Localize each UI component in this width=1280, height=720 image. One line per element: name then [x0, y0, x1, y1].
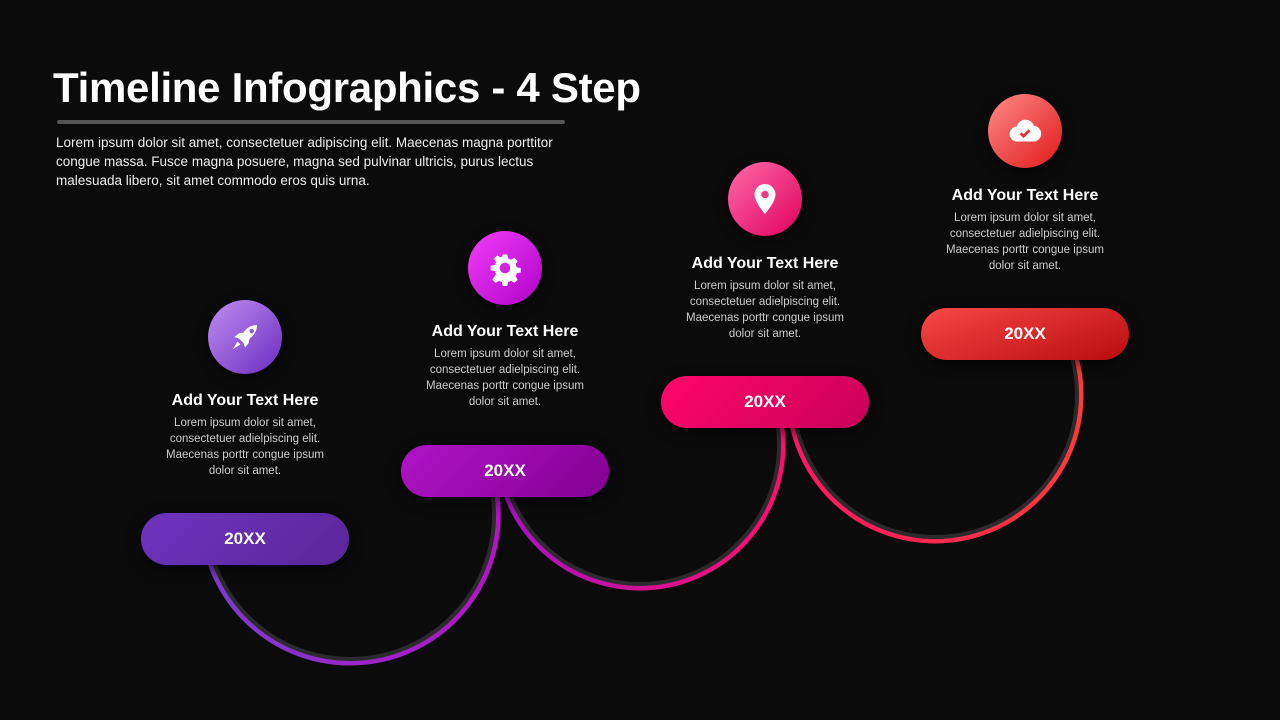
icon: cloud check [988, 94, 1062, 168]
text block: consectetuer adielpiscing elit. [690, 296, 840, 308]
text block: Add Your Text Here [432, 323, 578, 340]
text block [166, 392, 324, 477]
text block [686, 255, 844, 340]
text block: Add Your Text Here [952, 187, 1098, 204]
step 1 [141, 300, 349, 579]
pill: 20XX: 20XX [484, 461, 526, 480]
text block: Maecenas porttr congue ipsum [686, 312, 844, 324]
pill: 20XX [401, 445, 609, 497]
title: Timeline Infographics - 4 Step [53, 64, 641, 111]
text block: Lorem ipsum dolor sit amet, [954, 212, 1096, 224]
text block: Maecenas porttr congue ipsum [166, 449, 324, 461]
text block: Maecenas porttr congue ipsum [426, 380, 584, 392]
step 3 [661, 162, 869, 442]
text block: Add Your Text Here [172, 392, 318, 409]
text block: dolor sit amet. [469, 396, 541, 408]
step 2 [401, 231, 609, 511]
pill: 20XX: 20XX [744, 392, 786, 411]
text block: dolor sit amet. [729, 328, 801, 340]
text block [946, 187, 1104, 272]
pill: 20XX: 20XX [1004, 324, 1046, 343]
text block: dolor sit amet. [989, 260, 1061, 272]
text block: Lorem ipsum dolor sit amet, [174, 417, 316, 429]
icon: location pin [728, 162, 802, 236]
text block: consectetuer adielpiscing elit. [170, 433, 320, 445]
intro text: Lorem ipsum dolor sit amet, consectetuer adipiscing elit. Maecenas magna porttitor congue massa. Fusce magna posuere, magna sed pulvinar ultricis, purus lectus malesuada libero, sit amet commodo eros quis urna. [56, 135, 553, 188]
text block: Lorem ipsum dolor sit amet, [434, 348, 576, 360]
pill: 20XX: 20XX [224, 529, 266, 548]
pill: 20XX [661, 376, 869, 428]
icon: rocket [208, 300, 282, 374]
text block: consectetuer adielpiscing elit. [950, 228, 1100, 240]
step 4 [921, 94, 1129, 374]
text block: dolor sit amet. [209, 465, 281, 477]
icon: gear [468, 231, 542, 305]
text block: consectetuer adielpiscing elit. [430, 364, 580, 376]
text block: Maecenas porttr congue ipsum [946, 244, 1104, 256]
pill: 20XX [141, 513, 349, 565]
text block [426, 323, 584, 408]
text block: Lorem ipsum dolor sit amet, [694, 280, 836, 292]
text block: Add Your Text Here [692, 255, 838, 272]
pill: 20XX [921, 308, 1129, 360]
